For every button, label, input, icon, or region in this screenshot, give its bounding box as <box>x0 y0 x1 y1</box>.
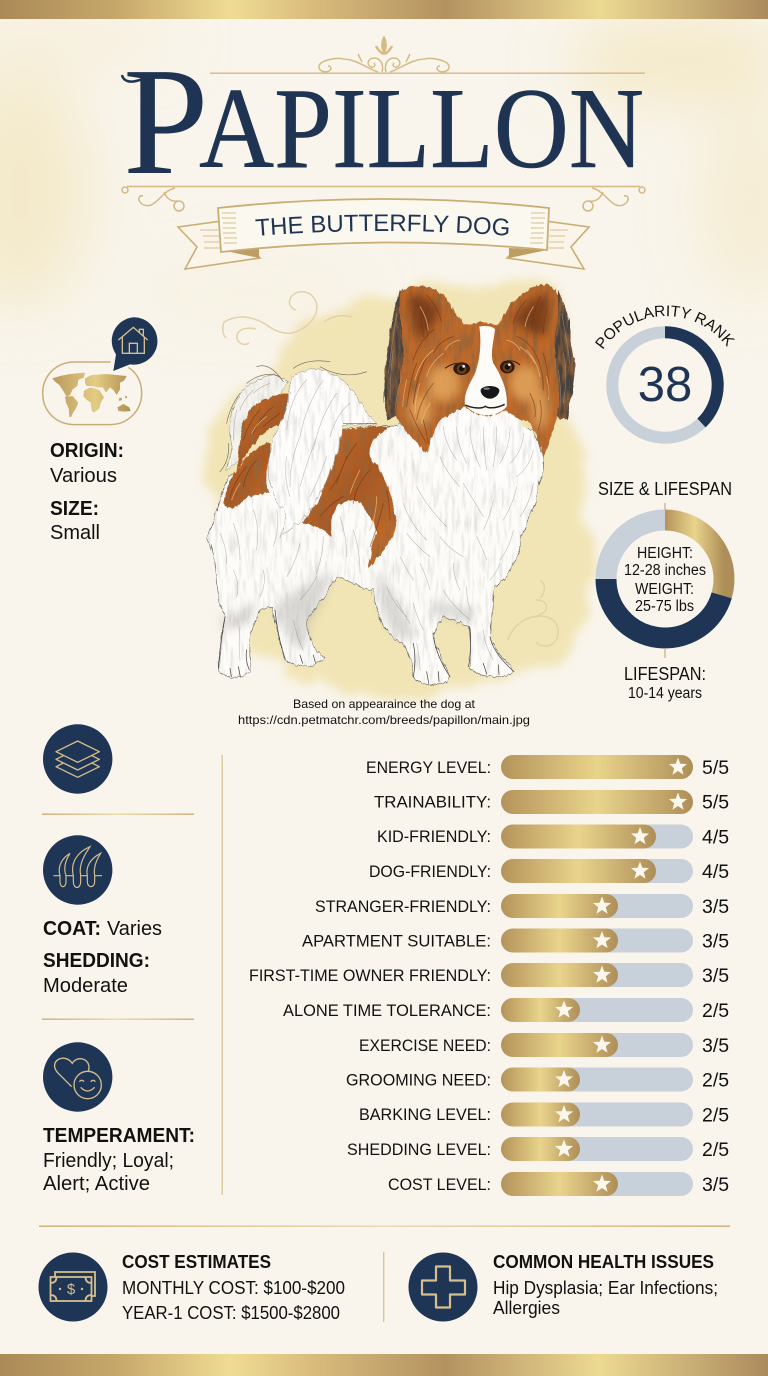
title block <box>120 36 646 270</box>
row: trainability: TRAINABILITY: <box>374 793 491 812</box>
row: cost level <box>388 1172 729 1196</box>
shedding text: Moderate <box>43 975 128 997</box>
panel: popularity rank <box>595 306 735 444</box>
face details <box>445 361 520 408</box>
heading: curved label: POPULARITY RANK <box>595 306 735 349</box>
health text: Allergies <box>493 1298 560 1318</box>
tail plume <box>237 393 294 470</box>
icon: banknotes <box>38 1252 108 1322</box>
donut labels: 25-75 lbs <box>635 598 694 615</box>
health text: COMMON HEALTH ISSUES <box>493 1252 714 1272</box>
image caption <box>238 697 530 727</box>
cost text: YEAR-1 COST: $1500-$2800 <box>122 1303 340 1323</box>
panel: coat and temperament <box>42 724 195 1195</box>
illustration: papillon dog <box>207 284 575 685</box>
row: energy level: 5/5 <box>702 757 729 779</box>
divider <box>42 1018 194 1020</box>
title text: APILLON <box>199 65 644 193</box>
lighter cheeks <box>408 365 548 430</box>
bottom gold band <box>0 1354 768 1376</box>
origin text <box>50 440 124 487</box>
icon: home bubble <box>112 317 157 371</box>
temperament text: Alert; Active <box>43 1173 150 1195</box>
row: kid-friendly: KID-FRIENDLY: <box>377 827 491 846</box>
cost text <box>122 1252 345 1323</box>
row: first-time owner friendly <box>249 963 729 987</box>
coat text: Varies <box>107 918 162 940</box>
row: dog-friendly: 4/5 <box>702 861 729 883</box>
cost text: MONTHLY COST: $100-$200 <box>122 1278 345 1298</box>
coat text <box>43 918 162 940</box>
tail and body <box>207 375 543 685</box>
title text: P <box>123 37 209 207</box>
icon: layers <box>43 724 112 794</box>
image caption: https://cdn.petmatchr.com/breeds/papillon/main.jpg <box>238 713 530 727</box>
health text: Hip Dysplasia; Ear Infections; <box>493 1278 718 1298</box>
origin text: ORIGIN: <box>50 440 124 462</box>
row: cost level: COST LEVEL: <box>388 1175 491 1194</box>
row: alone time tolerance <box>283 998 729 1022</box>
row: energy level: ENERGY LEVEL: <box>366 758 491 777</box>
icon: banknotes: $ <box>67 1281 76 1298</box>
watercolor wash behind dog <box>205 289 590 685</box>
shedding text: SHEDDING: <box>43 950 150 972</box>
row: barking level: 2/5 <box>702 1104 729 1126</box>
black fringe highlights <box>388 313 570 410</box>
temperament text: TEMPERAMENT: <box>43 1125 195 1147</box>
row: grooming need: 2/5 <box>702 1070 729 1092</box>
size text: SIZE: <box>50 498 99 520</box>
donut labels: 12-28 inches <box>624 562 706 579</box>
rust patches <box>223 427 397 568</box>
crown ornament <box>319 37 449 72</box>
icon: hair follicles <box>43 835 112 905</box>
cost text: COST ESTIMATES <box>122 1252 271 1272</box>
inner ears <box>408 293 549 340</box>
heading: SIZE & LIFESPAN <box>598 479 732 499</box>
row: stranger-friendly: STRANGER-FRIENDLY: <box>315 897 491 916</box>
row: shedding level: 2/5 <box>702 1139 729 1161</box>
row: alone time tolerance: 2/5 <box>702 1000 729 1022</box>
white fur strokes <box>220 380 533 670</box>
temperament text: Friendly; Loyal; <box>43 1150 174 1172</box>
row: grooming need <box>346 1068 729 1092</box>
lifespan: 10-14 years <box>628 685 702 702</box>
donut chart <box>606 503 724 658</box>
ribbon banner <box>176 198 590 270</box>
row: kid-friendly: 4/5 <box>702 826 729 848</box>
icon: medical cross <box>408 1252 478 1322</box>
donut labels: HEIGHT: <box>637 545 693 562</box>
panel: cost estimates <box>38 1252 345 1323</box>
row: grooming need: GROOMING NEED: <box>346 1070 491 1090</box>
ring chart <box>612 332 718 438</box>
body shading <box>220 570 473 648</box>
row: alone time tolerance: ALONE TIME TOLERANCE: <box>283 1001 491 1020</box>
row: stranger-friendly: 3/5 <box>702 896 729 918</box>
horizontal divider <box>39 1226 730 1227</box>
row: apartment suitable: APARTMENT SUITABLE: <box>302 932 491 950</box>
row: barking level <box>359 1102 729 1126</box>
icon: world map pill <box>43 362 142 425</box>
top rule <box>210 72 645 74</box>
size text: Small <box>50 522 100 544</box>
rank number: 38 <box>638 358 692 412</box>
black ear fringes <box>384 290 575 420</box>
lower flourish <box>122 186 645 211</box>
row: dog-friendly: DOG-FRIENDLY: <box>369 862 491 881</box>
row: kid-friendly <box>377 824 729 848</box>
top gold band <box>0 0 768 19</box>
fur strokes on rust <box>230 295 549 547</box>
head <box>397 284 559 457</box>
row: first-time owner friendly: FIRST-TIME OWNER FRIENDLY: <box>249 966 491 985</box>
tail wisps <box>220 361 377 472</box>
row: trainability: 5/5 <box>702 792 729 814</box>
vertical divider <box>222 755 223 1195</box>
panel: common health issues <box>408 1252 718 1322</box>
shedding text <box>43 950 150 997</box>
title text <box>122 37 644 207</box>
panel: origin and size <box>43 317 157 544</box>
ribbon banner: THE BUTTERFLY DOG <box>255 214 509 236</box>
row: apartment suitable <box>302 928 729 952</box>
decorative swirls <box>223 292 558 646</box>
row: energy level <box>366 755 729 779</box>
donut labels: WEIGHT: <box>635 581 694 598</box>
row: exercise need: 3/5 <box>702 1035 729 1057</box>
temperament text <box>43 1125 195 1195</box>
row: trainability <box>374 790 729 814</box>
health text <box>493 1252 718 1318</box>
white blaze and muzzle <box>465 326 507 415</box>
lifespan: LIFESPAN: <box>624 664 706 684</box>
origin text: Various <box>50 465 117 487</box>
coat text: COAT: <box>43 918 101 940</box>
divider <box>42 814 194 815</box>
image caption: Based on appearaince the dog at <box>293 697 476 711</box>
lifespan <box>624 664 706 702</box>
rating chart <box>249 755 729 1196</box>
size text <box>50 498 100 544</box>
row: shedding level: SHEDDING LEVEL: <box>347 1140 491 1159</box>
row: dog-friendly <box>369 859 729 883</box>
icon: heart and smile <box>43 1042 112 1112</box>
row: first-time owner friendly: 3/5 <box>702 965 729 987</box>
row: barking level: BARKING LEVEL: <box>359 1105 491 1124</box>
panel: size and lifespan <box>598 479 732 702</box>
white bib <box>387 407 537 498</box>
row: stranger-friendly <box>315 894 729 918</box>
row: exercise need: EXERCISE NEED: <box>359 1036 491 1055</box>
row: exercise need <box>359 1033 729 1057</box>
vertical divider <box>383 1252 384 1322</box>
row: apartment suitable: 3/5 <box>702 930 729 952</box>
row: cost level: 3/5 <box>702 1174 729 1196</box>
donut labels <box>624 545 706 615</box>
paw lines <box>218 610 514 683</box>
row: shedding level <box>347 1137 729 1161</box>
